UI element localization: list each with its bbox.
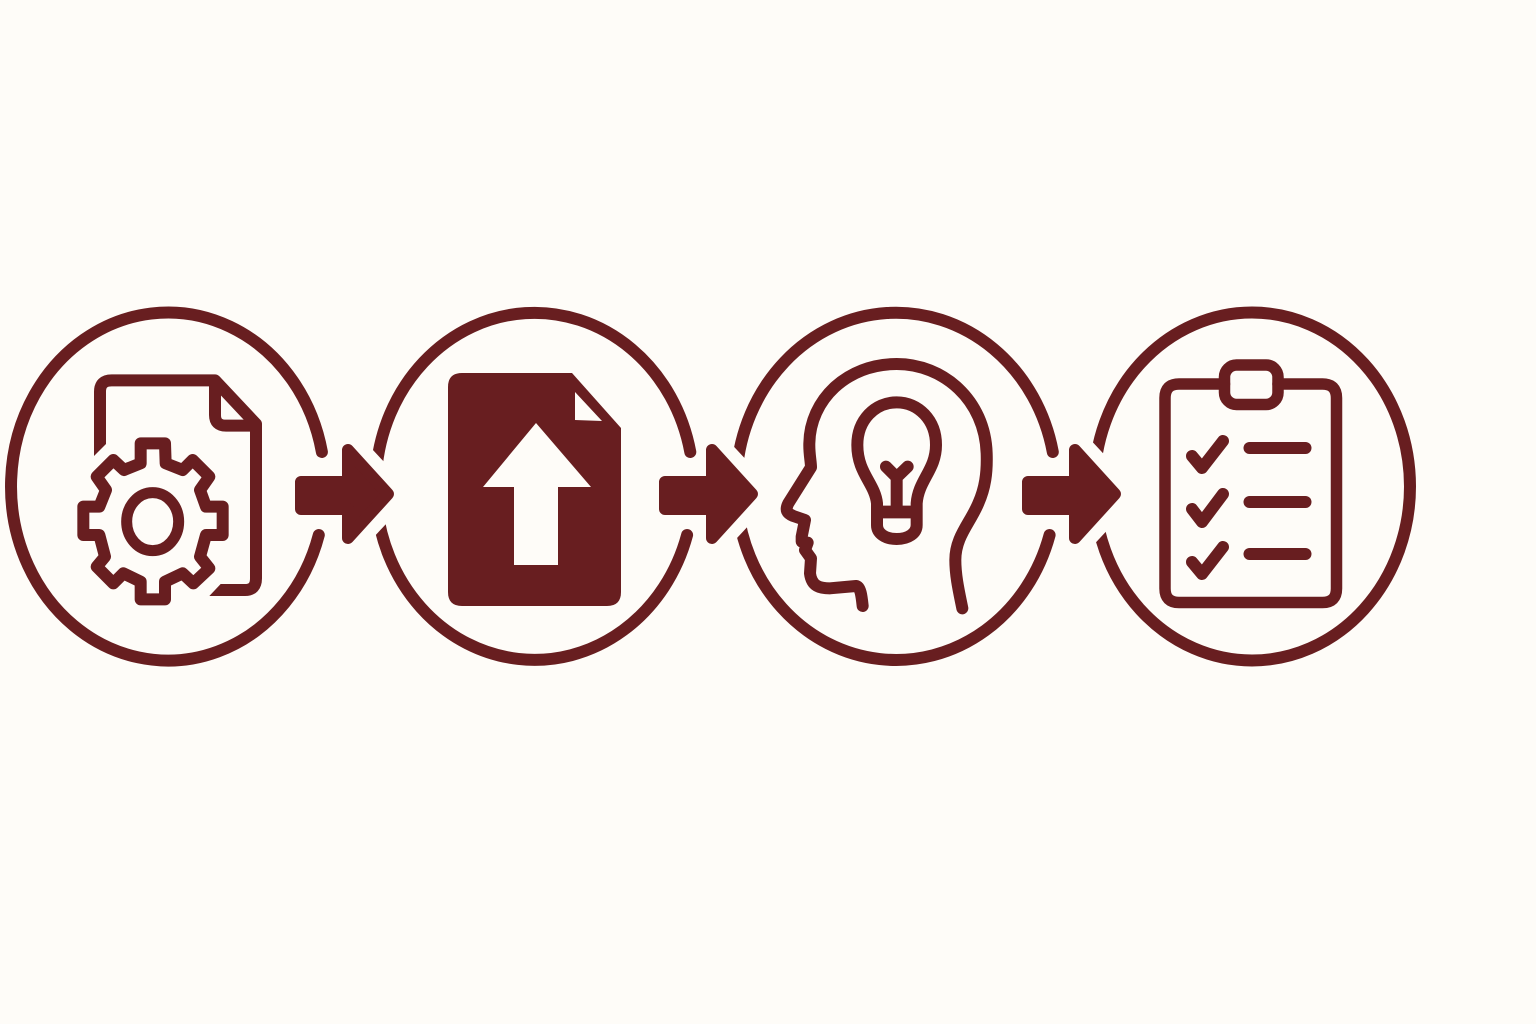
filament — [886, 467, 908, 512]
light bulb — [857, 402, 936, 539]
arrow 1 — [301, 450, 388, 538]
icon: clipboard — [1165, 365, 1336, 602]
head profile — [787, 364, 987, 608]
step 2: document upload — [376, 313, 690, 660]
icon: head and bulb — [787, 364, 987, 608]
ring 3 — [737, 313, 1053, 660]
gear hub — [127, 493, 179, 551]
clipboard clip — [1224, 365, 1278, 404]
arrow 3 — [1028, 450, 1115, 538]
icon: upload arrow — [483, 423, 591, 565]
document fold — [575, 392, 602, 421]
bulb base band — [877, 493, 917, 531]
ring 4 — [1094, 312, 1410, 660]
ring 2 — [376, 313, 690, 660]
ring 1 — [11, 313, 322, 661]
checklist rows — [1192, 441, 1306, 574]
step 4: checklist clipboard — [1094, 312, 1410, 660]
step 1: settings document — [11, 313, 322, 661]
icon: filled document — [448, 373, 621, 606]
gear — [83, 443, 223, 599]
step 3: head with light bulb — [737, 313, 1053, 660]
document outline — [94, 380, 256, 596]
arrow 2 — [665, 450, 752, 538]
icon: document with gear — [83, 380, 256, 599]
clipboard board — [1165, 384, 1336, 602]
